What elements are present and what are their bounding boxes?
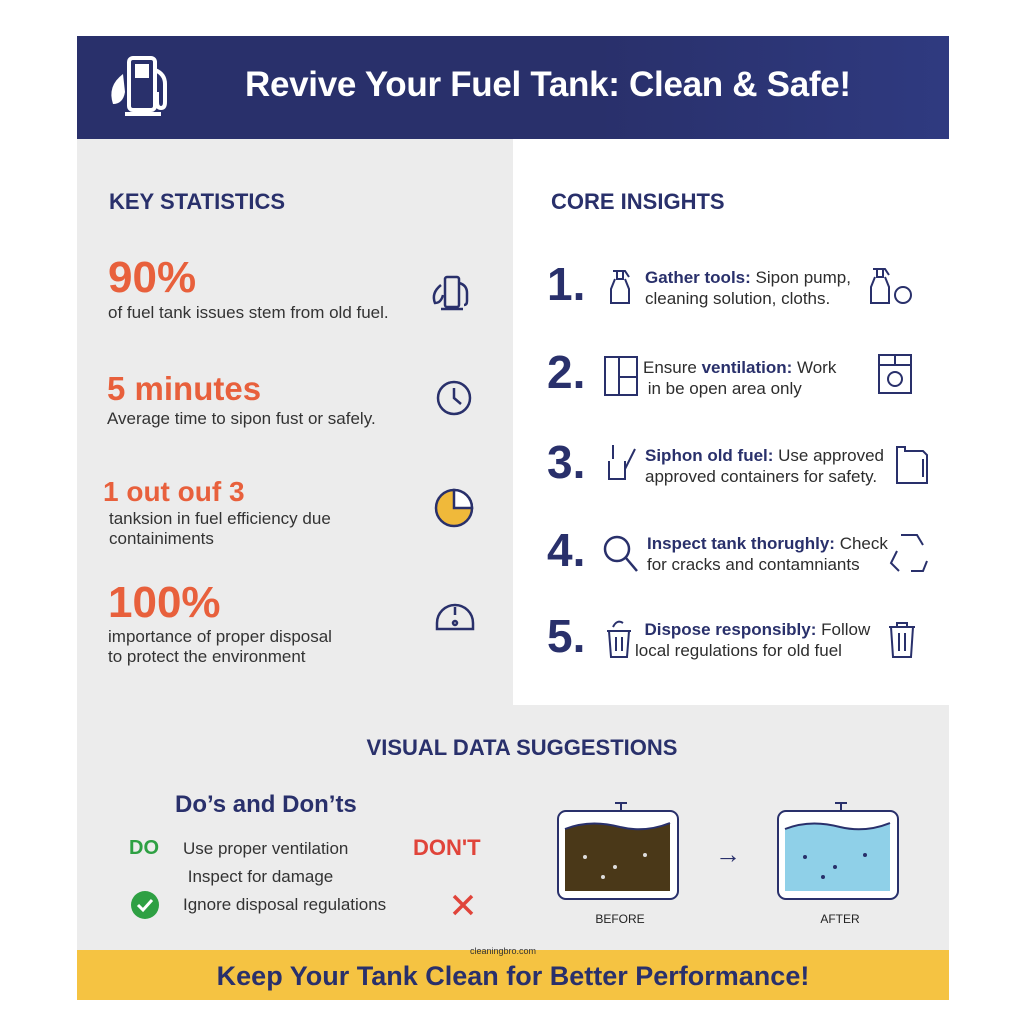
do's and don'ts: Do’s and Don’ts — [175, 791, 357, 818]
icon: pie chart — [434, 488, 474, 528]
step 2: in be open area only — [648, 379, 802, 398]
tank after: AFTER — [820, 912, 860, 926]
step 4: for cracks and contamniants — [647, 555, 860, 574]
watermark: cleaningbro.com — [470, 946, 536, 956]
step 1: 1. — [547, 258, 585, 310]
tank before: BEFORE — [595, 912, 645, 926]
stat 3 — [103, 476, 331, 548]
step 4 — [547, 524, 928, 576]
do's and don'ts: Ignore disposal regulations — [183, 895, 386, 914]
stat 2 — [107, 370, 376, 428]
icon: pump — [432, 276, 468, 310]
step 4: Inspect tank thorughly: Check — [647, 534, 888, 553]
stat 1: 90% — [108, 253, 196, 302]
do's and don'ts: Use proper ventilation — [183, 839, 348, 858]
step 3: 3. — [547, 436, 585, 488]
step 5: local regulations for old fuel — [635, 641, 842, 660]
stat 4: importance of proper disposal — [108, 627, 332, 646]
stat 1: of fuel tank issues stem from old fuel. — [108, 303, 389, 322]
icon: check — [131, 891, 159, 919]
do's and don'ts: Inspect for damage — [188, 867, 333, 886]
footer banner: Keep Your Tank Clean for Better Performance! — [217, 961, 809, 991]
do's and don'ts: DON'T — [413, 835, 481, 860]
step 4: 4. — [547, 524, 585, 576]
step 2: Ensure ventilation: Work — [643, 358, 836, 377]
step 1: cleaning solution, cloths. — [645, 289, 830, 308]
tank after — [777, 802, 899, 926]
icon: fuel pump with leaf — [111, 56, 167, 116]
title: Revive Your Fuel Tank: Clean & Safe! — [245, 65, 851, 104]
heading: visual data suggestions: VISUAL DATA SUGGESTIONS — [367, 735, 677, 760]
panel: core insights — [513, 139, 949, 705]
step 5: Dispose responsibly: Follow — [644, 620, 870, 639]
footer banner — [77, 950, 949, 1000]
icon: cross — [452, 894, 474, 916]
panel: key statistics — [77, 139, 513, 705]
heading: core insights: CORE INSIGHTS — [551, 189, 725, 214]
heading: key statistics: KEY STATISTICS — [109, 189, 285, 214]
stat 3: tanksion in fuel efficiency due — [109, 509, 331, 528]
tank before — [557, 802, 679, 926]
do's and don'ts: DO — [129, 837, 159, 859]
step 2 — [547, 346, 912, 398]
stat 2: Average time to sipon fust or safely. — [107, 409, 376, 428]
stat 3: 1 out ouf 3 — [103, 476, 245, 507]
stat 4: 100% — [108, 578, 221, 627]
arrow: → — [715, 839, 741, 869]
header — [77, 36, 949, 139]
stat 4 — [108, 578, 332, 666]
step 2: 2. — [547, 346, 585, 398]
stat 4: to protect the environment — [108, 647, 306, 666]
panel: visual data suggestions — [77, 705, 949, 950]
step 3: Siphon old fuel: Use approved — [645, 446, 884, 465]
icon: gauge — [436, 604, 474, 630]
stat 2: 5 minutes — [107, 370, 261, 407]
step 3: approved containers for safety. — [645, 467, 877, 486]
step 5 — [547, 610, 915, 662]
do's and don'ts — [129, 791, 481, 919]
step 1 — [547, 258, 912, 310]
icon: clock — [436, 380, 472, 416]
step 5: 5. — [547, 610, 585, 662]
stat 3: containiments — [109, 529, 214, 548]
step 3 — [547, 436, 928, 488]
step 1: Gather tools: Sipon pump, — [645, 268, 851, 287]
stat 1 — [108, 253, 389, 322]
